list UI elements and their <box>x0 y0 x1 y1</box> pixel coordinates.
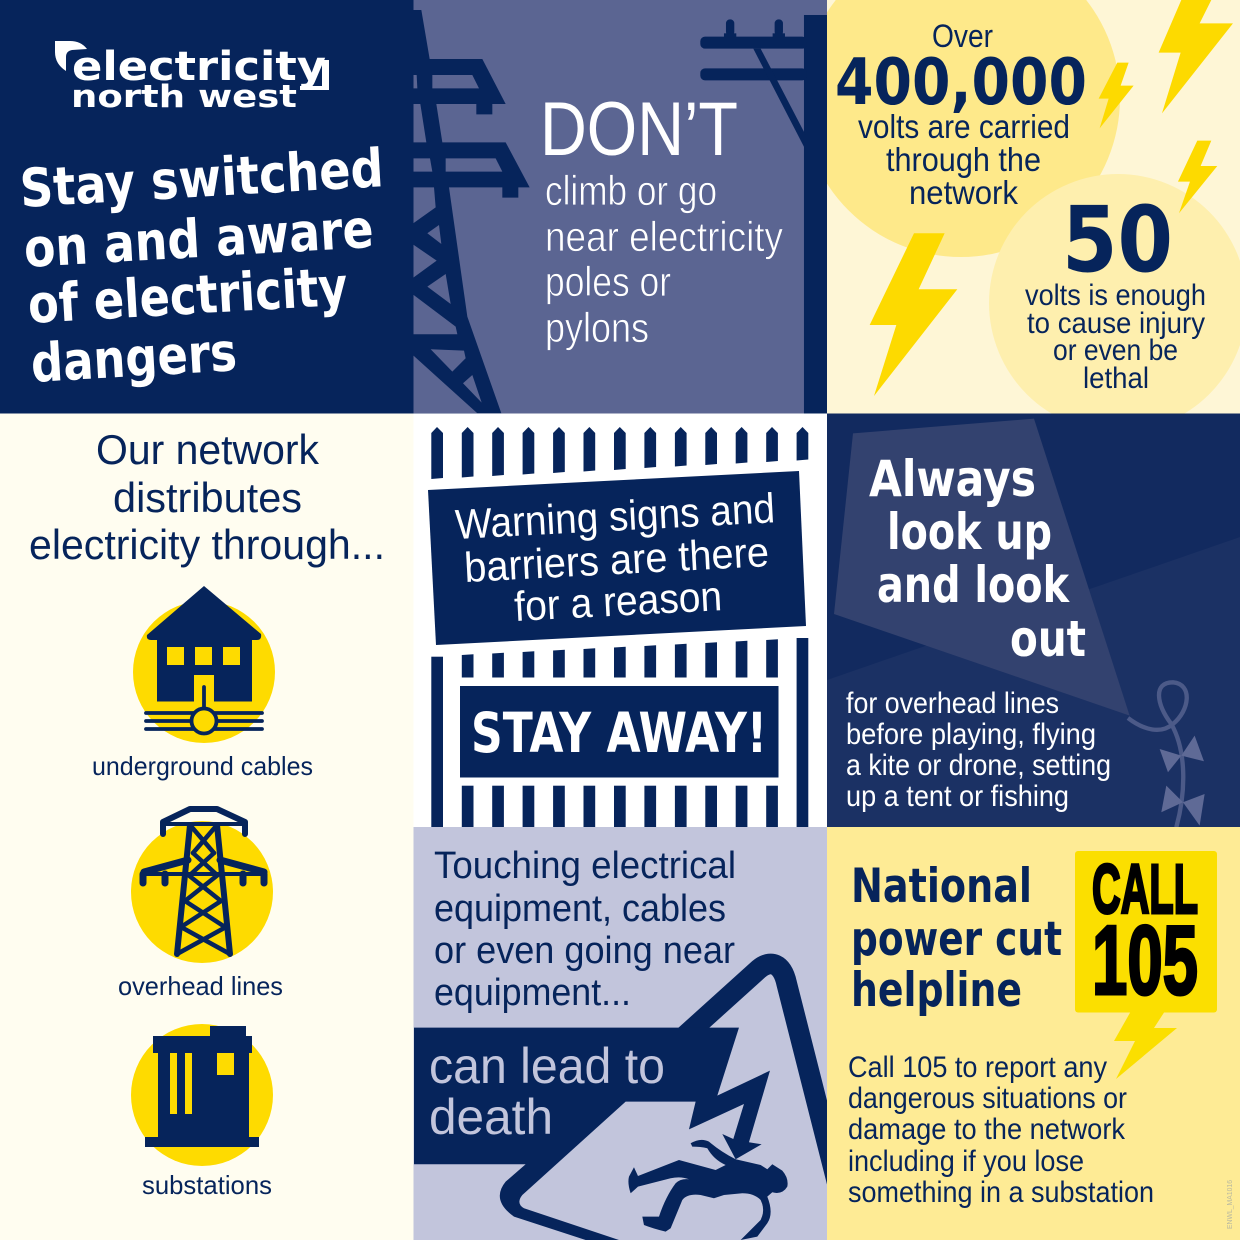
heading: always look up and look out: Always <box>869 450 1036 508</box>
panel: network <box>0 414 414 1240</box>
icons: lightning bolts <box>870 0 1233 396</box>
sign: stay away: STAY AWAY! <box>471 701 767 765</box>
heading: always look up and look out: and look <box>877 556 1070 614</box>
label: overhead lines: overhead lines <box>118 971 283 1001</box>
heading: national power cut helpline: power cut <box>851 912 1062 967</box>
text: call 105 to report: damage to the network <box>848 1113 1126 1146</box>
icon: pylon silhouette <box>412 10 530 413</box>
heading: national power cut helpline: helpline <box>851 963 1022 1018</box>
sign: warning signs and barriers: Warning signs and <box>454 484 776 548</box>
text: over 400,000 volts: Over <box>932 18 993 54</box>
heading: national power cut helpline <box>851 859 1062 1018</box>
heading: stay switched on: Stay switched <box>18 138 385 220</box>
text: touching electrical equipment <box>434 845 736 1014</box>
text: for overhead lines: up a tent or fishing <box>846 780 1069 813</box>
icon: substations <box>131 1024 273 1166</box>
callout: call 105 <box>1075 850 1217 1079</box>
heading: stay switched on: dangers <box>29 322 238 395</box>
text: can lead to death: can lead to <box>429 1038 665 1094</box>
text: for overhead lines: for overhead lines <box>846 687 1059 720</box>
panel: don't climb <box>412 0 828 414</box>
heading: stay switched on: on and aware <box>22 199 375 280</box>
fence: top pickets <box>431 427 808 479</box>
text: 50 volts <box>1025 204 1205 388</box>
fence: lower pickets <box>431 638 808 827</box>
heading: our network distributes: distributes <box>113 474 302 521</box>
text: touching electrical equipment: equipment... <box>434 972 631 1014</box>
text: can lead to death: death <box>429 1089 553 1145</box>
text: touching electrical equipment: Touching electrical <box>434 845 736 887</box>
text: 50 volts: 50 <box>1062 188 1173 293</box>
text: over 400,000 volts: volts are carried <box>858 108 1070 145</box>
heading: always look up and look out: out <box>1010 610 1086 668</box>
panel: voltage facts <box>802 0 1240 432</box>
text: for overhead lines <box>846 687 1111 813</box>
text: climb or go near: poles or <box>545 258 671 305</box>
icon: electricity pole <box>700 15 828 414</box>
text: climb or go near: pylons <box>545 304 649 351</box>
text: 50 volts: lethal <box>1083 362 1149 395</box>
panel: title <box>0 0 414 414</box>
text: climb or go near <box>545 167 783 351</box>
text: can lead to death <box>431 1046 663 1134</box>
sign: warning signs and barriers <box>428 471 806 645</box>
text: artwork code: ENWL_MA1016 <box>1225 1180 1234 1229</box>
text: climb or go near: near electricity <box>545 213 783 260</box>
panel: helpline <box>827 827 1240 1240</box>
circle: 400,000 volts <box>802 0 1120 257</box>
heading: always look up and look out: look up <box>887 503 1052 561</box>
text: call 105 to report: dangerous situations or <box>848 1082 1127 1115</box>
illustration: warning triangle with bolt and falling figure <box>414 964 844 1240</box>
text: call 105 to report: something in a substation <box>848 1176 1154 1209</box>
circle: 50 volts <box>989 174 1240 432</box>
text: touching electrical equipment: or even going near <box>434 930 735 972</box>
sign: warning signs and barriers: barriers are there <box>463 528 770 591</box>
text: for overhead lines: before playing, flying <box>846 718 1096 751</box>
text: over 400,000 volts: 400,000 <box>835 46 1087 120</box>
sign: warning signs and barriers: for a reason <box>513 572 723 630</box>
icon: overhead lines <box>131 809 273 963</box>
heading: our network distributes <box>29 426 385 568</box>
logo: electricity north west: north west <box>71 79 297 115</box>
text: call 105 to report: Call 105 to report any <box>848 1051 1107 1084</box>
text: over 400,000 volts: through the <box>886 141 1041 178</box>
panel: warning signs <box>414 414 827 827</box>
heading: stay switched on: of electricity <box>26 257 349 336</box>
logo: electricity north west <box>55 41 329 115</box>
heading: DON'T: DON’T <box>540 87 738 172</box>
text: 50 volts: to cause injury <box>1027 307 1205 340</box>
icon: kite <box>834 419 1205 827</box>
text: 50 volts: or even be <box>1053 334 1178 367</box>
sign: stay away <box>460 686 778 778</box>
heading: always look up and look out <box>869 450 1086 668</box>
heading: stay switched on <box>18 138 385 395</box>
label: underground cables: underground cables <box>92 751 313 781</box>
text: over 400,000 volts: network <box>909 174 1018 211</box>
logo: electricity north west: electricity <box>72 44 326 90</box>
text: call 105 to report <box>848 1051 1154 1209</box>
text: for overhead lines: a kite or drone, setting <box>846 749 1111 782</box>
heading: our network distributes: Our network <box>96 426 320 473</box>
panel: always look up <box>827 414 1240 827</box>
panel: touching equipment <box>414 827 844 1240</box>
label: substations: substations <box>142 1170 272 1200</box>
text: over 400,000 volts <box>835 18 1087 211</box>
icon: underground cables <box>133 586 275 743</box>
text: touching electrical equipment: equipment, cables <box>434 888 726 930</box>
text: call 105 to report: including if you lose <box>848 1145 1084 1178</box>
heading: our network distributes: electricity through... <box>29 521 385 568</box>
text: 50 volts: volts is enough <box>1025 279 1206 312</box>
heading: national power cut helpline: National <box>851 859 1032 914</box>
text: climb or go near: climb or go <box>545 167 717 214</box>
